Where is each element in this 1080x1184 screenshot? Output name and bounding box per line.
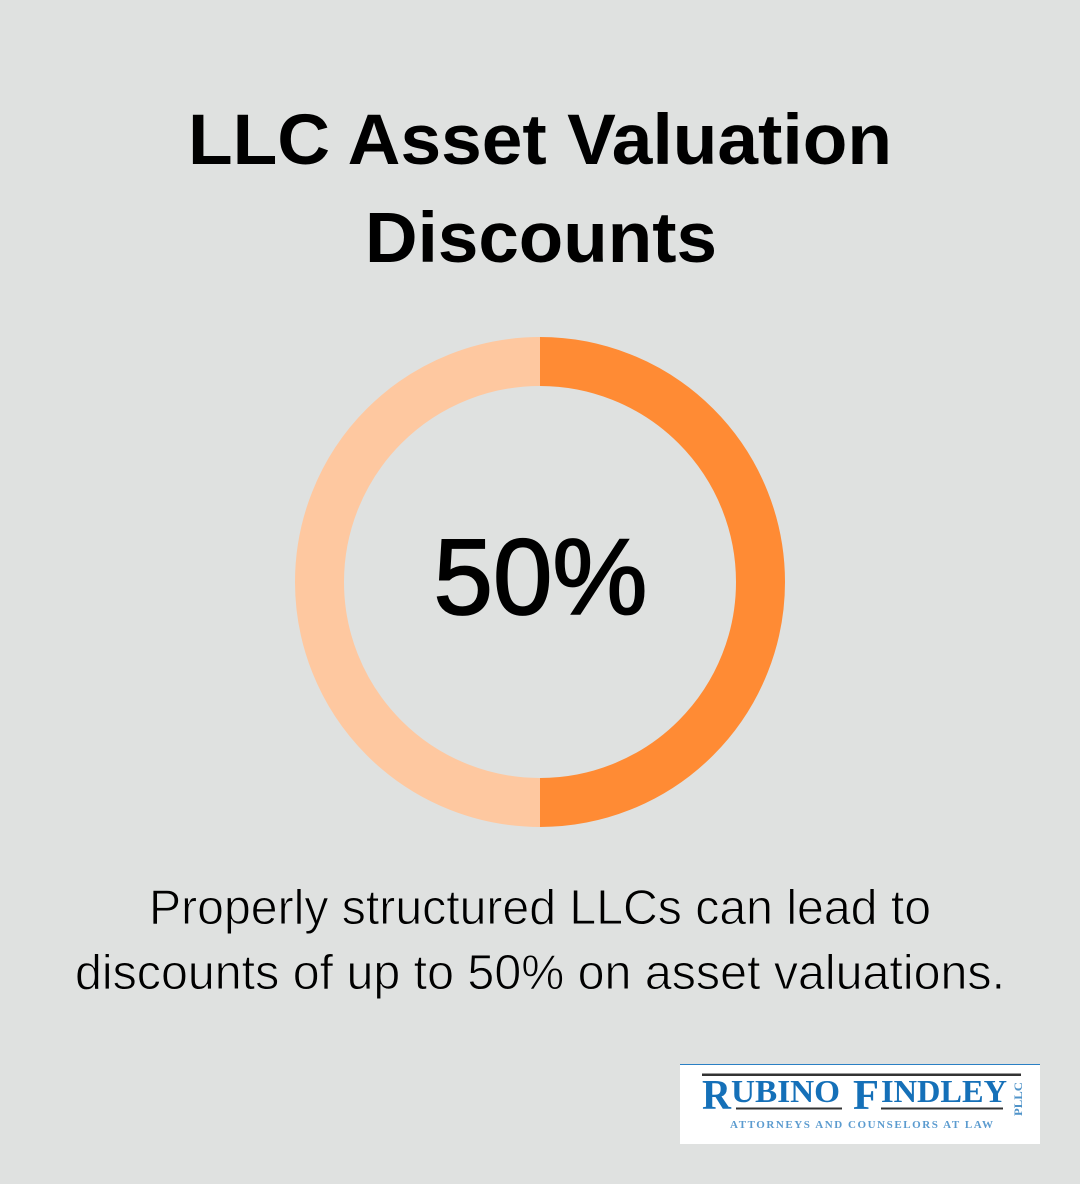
center value: 50% xyxy=(434,516,648,637)
highlighted 50% arc xyxy=(540,362,760,802)
logo: Rubino Findley PLLC: ATTORNEYS AND COUNSELORS AT LAW xyxy=(730,1119,993,1131)
description: discounts of up to 50% on asset valuations. xyxy=(75,946,1005,1000)
logo: Rubino Findley PLLC: PLLC xyxy=(1011,1082,1025,1116)
description: Properly structured LLCs can lead to xyxy=(149,881,931,935)
logo: Rubino Findley PLLC xyxy=(680,1064,1040,1144)
title xyxy=(188,101,892,278)
title: LLC Asset Valuation xyxy=(188,101,892,180)
logo: Rubino Findley PLLC: F xyxy=(853,1073,879,1119)
logo: Rubino Findley PLLC: INDLEY xyxy=(881,1073,1007,1109)
logo: Rubino Findley PLLC: R xyxy=(702,1073,732,1119)
description xyxy=(75,881,1005,1000)
donut chart: 50% xyxy=(320,362,760,802)
logo: Rubino Findley PLLC: UBINO xyxy=(731,1073,840,1109)
title: Discounts xyxy=(365,199,717,278)
remaining share arc xyxy=(320,362,540,802)
